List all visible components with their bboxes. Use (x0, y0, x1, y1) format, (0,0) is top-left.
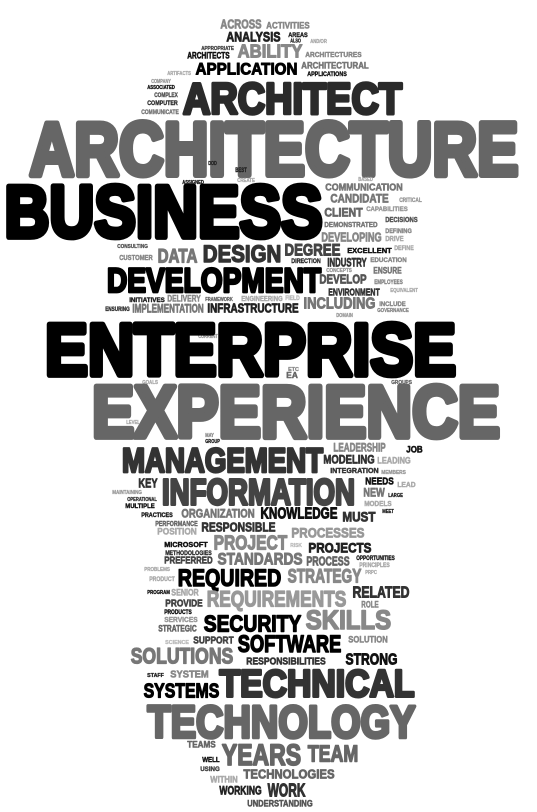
word: SOLUTIONS: SOLUTIONS (131, 643, 233, 668)
word: ACTIVITIES: ACTIVITIES (266, 21, 310, 31)
word: ASSIGNED: ASSIGNED (182, 180, 204, 186)
word: DEGREE: DEGREE (284, 240, 340, 260)
word: USING: USING (200, 766, 220, 773)
word: RESPONSIBLE: RESPONSIBLE (201, 520, 276, 535)
word: NEEDS: NEEDS (365, 477, 394, 488)
word: PROBLEMS: PROBLEMS (144, 567, 170, 573)
word: GROUP: GROUP (205, 439, 220, 445)
word: COMMUNICATE: COMMUNICATE (141, 109, 179, 116)
word: DATA: DATA (158, 245, 197, 267)
word: RISK: RISK (290, 543, 302, 549)
word: COMPANY: COMPANY (151, 79, 171, 85)
word: TEAMS: TEAMS (187, 740, 216, 750)
word: CUSTOMER: CUSTOMER (119, 253, 153, 262)
word: MANAGEMENT: MANAGEMENT (122, 442, 323, 480)
word: ARCHITECTURAL: ARCHITECTURAL (301, 61, 369, 71)
word: CURRENT: CURRENT (198, 334, 219, 340)
word: METHODOLOGIES: METHODOLOGIES (165, 550, 212, 557)
word: EMPLOYEES: EMPLOYEES (374, 279, 403, 286)
word: STAFF: STAFF (147, 673, 164, 679)
word: INFRASTRUCTURE: INFRASTRUCTURE (207, 301, 299, 316)
word: STRATEGY: STRATEGY (288, 565, 361, 587)
word: CAPABILITIES: CAPABILITIES (366, 206, 408, 213)
word: EDUCATION: EDUCATION (370, 257, 407, 264)
word: MUST: MUST (342, 510, 376, 526)
word: SOFTWARE: SOFTWARE (238, 631, 341, 658)
word: WORKING: WORKING (219, 785, 262, 798)
word: DEFINE: DEFINE (394, 245, 414, 252)
word: KEY: KEY (138, 476, 158, 491)
word: LEVEL: LEVEL (126, 420, 141, 426)
word: PROVIDE: PROVIDE (165, 599, 203, 610)
word: JOB: JOB (406, 445, 423, 455)
word: PERFORMANCE: PERFORMANCE (155, 519, 198, 528)
word: PROGRAM: PROGRAM (147, 590, 170, 596)
word: TECHNOLOGY: TECHNOLOGY (148, 696, 416, 747)
word: YEARS: YEARS (222, 739, 301, 772)
word: IMPLEMENTATION: IMPLEMENTATION (132, 303, 204, 316)
word: KNOWLEDGE: KNOWLEDGE (260, 506, 338, 522)
word: ARTIFACTS: ARTIFACTS (167, 71, 191, 77)
word: PRODUCT: PRODUCT (149, 576, 175, 583)
word: MULTIPLE: MULTIPLE (125, 503, 155, 510)
word: MEMBERS: MEMBERS (381, 470, 406, 476)
word: TECHNOLOGIES: TECHNOLOGIES (243, 767, 335, 782)
word: CONSULTING: CONSULTING (117, 244, 148, 250)
word: APPROPRIATE: APPROPRIATE (201, 46, 234, 52)
word: LARGE: LARGE (388, 493, 403, 499)
word: ABILITY: ABILITY (238, 41, 302, 61)
word: WORK: WORK (268, 780, 306, 800)
word: MICROSOFT: MICROSOFT (164, 540, 208, 549)
word: INDUSTRY: INDUSTRY (327, 257, 367, 270)
word: INCLUDING: INCLUDING (304, 296, 376, 312)
word: ROLE: ROLE (361, 600, 379, 610)
word: CREATE: CREATE (237, 178, 255, 184)
word: FRAMEWORK: FRAMEWORK (205, 297, 233, 303)
word: INITIATIVES: INITIATIVES (129, 297, 165, 304)
word: POSITION: POSITION (157, 527, 197, 537)
word: ETC: ETC (288, 367, 299, 373)
word: OPERATIONAL: OPERATIONAL (127, 497, 158, 503)
word: SERVICES: SERVICES (164, 615, 198, 624)
word: MODELING: MODELING (323, 454, 375, 467)
word: TECHNICAL: TECHNICAL (220, 663, 414, 705)
word: SECURITY: SECURITY (204, 610, 302, 636)
word: DOD: DOD (208, 161, 217, 167)
word: COMPLEX: COMPLEX (154, 92, 178, 99)
word: PROCESS: PROCESS (306, 554, 350, 569)
word: DEVELOPING: DEVELOPING (321, 230, 382, 245)
word: PRACTICES: PRACTICES (141, 512, 173, 519)
word: DIRECTION: DIRECTION (291, 258, 321, 265)
word: COMPUTER: COMPUTER (147, 100, 178, 107)
word: EXCELLENT: EXCELLENT (347, 246, 392, 255)
word: REQUIRED: REQUIRED (178, 565, 281, 592)
word: STRATEGIC: STRATEGIC (158, 624, 197, 634)
word: ENTERPRISE: ENTERPRISE (45, 310, 456, 391)
word: FIELD: FIELD (285, 295, 300, 302)
word: LEADERSHIP: LEADERSHIP (333, 442, 386, 455)
word: COMMUNICATION: COMMUNICATION (325, 183, 403, 194)
word: LEAD: LEAD (397, 480, 416, 489)
word: SUPPORT: SUPPORT (193, 636, 234, 647)
word: RELATED: RELATED (352, 584, 410, 602)
word: BASED: BASED (358, 177, 373, 183)
word: GOVERNANCE: GOVERNANCE (377, 308, 409, 314)
word: ENSURING: ENSURING (105, 307, 130, 313)
word: MAINTAINING: MAINTAINING (112, 490, 142, 496)
word: OPPORTUNITIES: OPPORTUNITIES (356, 555, 395, 562)
word: PRODUCTS: PRODUCTS (164, 609, 192, 616)
word: DRIVE: DRIVE (385, 234, 404, 243)
word: ASSOCIATED: ASSOCIATED (147, 85, 175, 91)
word: MAY: MAY (205, 433, 214, 439)
word: UNDERSTANDING: UNDERSTANDING (247, 799, 313, 809)
word: DELIVERY: DELIVERY (167, 294, 201, 304)
word: INTEGRATION: INTEGRATION (330, 466, 379, 475)
word: PROJECTS: PROJECTS (308, 541, 372, 557)
word: ORGANIZATION: ORGANIZATION (181, 508, 255, 521)
word: MODELS: MODELS (364, 499, 392, 508)
word: SYSTEM: SYSTEM (170, 670, 209, 681)
word: DEVELOP: DEVELOP (319, 272, 367, 287)
word: INCLUDE: INCLUDE (379, 301, 406, 308)
word: CONCEPTS: CONCEPTS (326, 268, 352, 274)
word: DEFINING: DEFINING (385, 228, 412, 235)
word: RESPONSIBILITIES: RESPONSIBILITIES (246, 657, 326, 668)
word: SENIOR: SENIOR (171, 588, 199, 598)
word: SKILLS: SKILLS (306, 605, 391, 635)
word: BEST: BEST (235, 167, 247, 174)
word: PRINCIPLES: PRINCIPLES (359, 562, 390, 569)
word: ARCHITECT: ARCHITECT (183, 74, 402, 123)
word: PROJECT: PROJECT (214, 531, 288, 554)
word: STANDARDS: STANDARDS (218, 550, 302, 568)
word: ACROSS: ACROSS (220, 17, 262, 32)
word: SCIENCE: SCIENCE (165, 640, 189, 646)
word: PROCESSES: PROCESSES (291, 526, 364, 542)
word: NEW: NEW (363, 487, 385, 500)
word: GROUPS: GROUPS (391, 380, 412, 386)
word: TEAM: TEAM (308, 740, 358, 766)
word: DECISIONS: DECISIONS (385, 215, 418, 224)
word: MEET: MEET (382, 509, 395, 515)
word: PREFERRED: PREFERRED (164, 556, 213, 567)
word: ENSURE: ENSURE (373, 266, 402, 276)
word: BUSINESS: BUSINESS (4, 172, 322, 253)
word: GOALS: GOALS (142, 380, 158, 386)
word: WELL: WELL (202, 755, 220, 764)
word: REQUIREMENTS: REQUIREMENTS (207, 586, 346, 611)
word: DEMONSTRATED: DEMONSTRATED (324, 220, 378, 229)
word: ALSO: ALSO (290, 38, 301, 44)
word: PRPC: PRPC (365, 570, 377, 576)
word: ANALYSIS: ANALYSIS (226, 30, 280, 46)
word: DOMAIN: DOMAIN (336, 313, 353, 319)
word: AND/OR: AND/OR (310, 39, 327, 45)
word: DESIGN: DESIGN (203, 241, 281, 268)
word: APPLICATIONS: APPLICATIONS (307, 71, 347, 78)
word: INFORMATION: INFORMATION (162, 472, 355, 513)
word: WITHIN: WITHIN (210, 775, 238, 785)
word: ARCHITECTS: ARCHITECTS (187, 51, 230, 61)
word: AREAS: AREAS (288, 32, 308, 39)
word: APPLICATION: APPLICATION (196, 60, 298, 78)
word: SYSTEMS: SYSTEMS (144, 679, 219, 702)
word: EA: EA (286, 371, 298, 380)
word: STRONG: STRONG (346, 652, 398, 668)
word: ENGINEERING: ENGINEERING (241, 294, 283, 303)
word: ARCHITECTURES: ARCHITECTURES (305, 50, 362, 59)
word: LEADING: LEADING (377, 456, 411, 466)
word: CRITICAL: CRITICAL (399, 198, 422, 204)
word: CLIENT: CLIENT (324, 207, 363, 220)
word: CANDIDATE: CANDIDATE (330, 193, 389, 206)
word: DEVELOPMENT: DEVELOPMENT (107, 262, 321, 300)
word: EQUIVALENT: EQUIVALENT (390, 288, 419, 294)
word: SOLUTION: SOLUTION (348, 635, 388, 645)
word: ENVIRONMENT: ENVIRONMENT (328, 288, 380, 299)
